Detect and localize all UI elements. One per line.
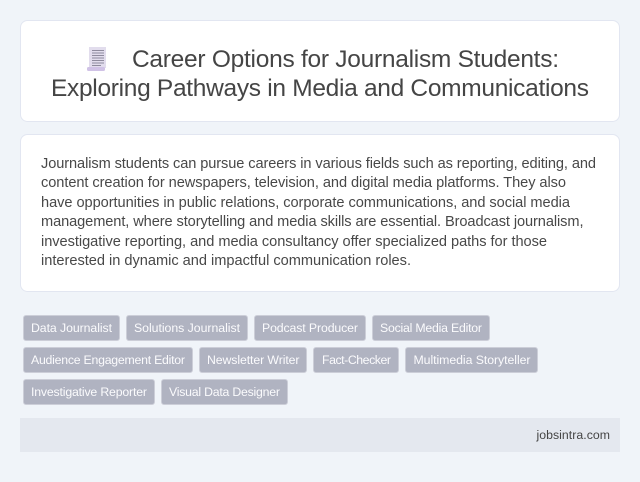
tag: Fact-Checker <box>314 348 398 372</box>
tag: Fact-Checker: Fact-Checker <box>322 353 391 367</box>
tag: Newsletter Writer: Newsletter Writer <box>207 353 300 367</box>
title <box>51 46 589 102</box>
panel: title card <box>20 20 620 122</box>
tag: Newsletter Writer <box>200 348 306 372</box>
tag: Podcast Producer <box>254 316 366 340</box>
tag: Social Media Editor: Social Media Editor <box>380 321 482 335</box>
tag: Data Journalist: Data Journalist <box>31 321 113 335</box>
tag: Audience Engagement Editor <box>24 348 192 372</box>
tag: Solutions Journalist <box>126 316 248 340</box>
description text: Journalism students can pursue careers in various fields such as reporting, editing, and <box>41 156 596 172</box>
footer site name: jobsintra.com <box>536 428 610 442</box>
panel: description card <box>20 134 620 292</box>
description text: interested in dynamic and impactful communication roles. <box>41 253 411 269</box>
tag: Podcast Producer: Podcast Producer <box>262 321 358 335</box>
description text <box>41 156 596 269</box>
tag: Multimedia Storyteller <box>406 348 538 372</box>
title: Exploring Pathways in Media and Communications <box>51 75 589 102</box>
tag: Multimedia Storyteller: Multimedia Storyteller <box>414 353 530 367</box>
icon: newspaper scroll <box>87 47 106 71</box>
tag: Visual Data Designer: Visual Data Designer <box>169 385 280 399</box>
description text: management, where storytelling and media skills are essential. Broadcast journalism, <box>41 214 584 230</box>
title: Career Options for Journalism Students: <box>132 46 559 73</box>
tag list <box>24 316 538 404</box>
tag: Solutions Journalist: Solutions Journalist <box>134 321 241 335</box>
tag: Investigative Reporter <box>24 380 154 404</box>
tag: Visual Data Designer <box>162 380 288 404</box>
tag: Data Journalist <box>24 316 120 340</box>
tag: Investigative Reporter: Investigative Reporter <box>31 385 147 399</box>
tag: Audience Engagement Editor: Audience Engagement Editor <box>31 353 185 367</box>
footer <box>20 418 620 452</box>
description text: content creation for newspapers, television, and digital media platforms. They also <box>41 175 566 191</box>
description text: investigative reporting, and media consultancy offer specialized paths for those <box>41 234 547 250</box>
description text: have opportunities in public relations, corporate communications, and social media <box>41 195 571 211</box>
tag: Social Media Editor <box>372 316 490 340</box>
